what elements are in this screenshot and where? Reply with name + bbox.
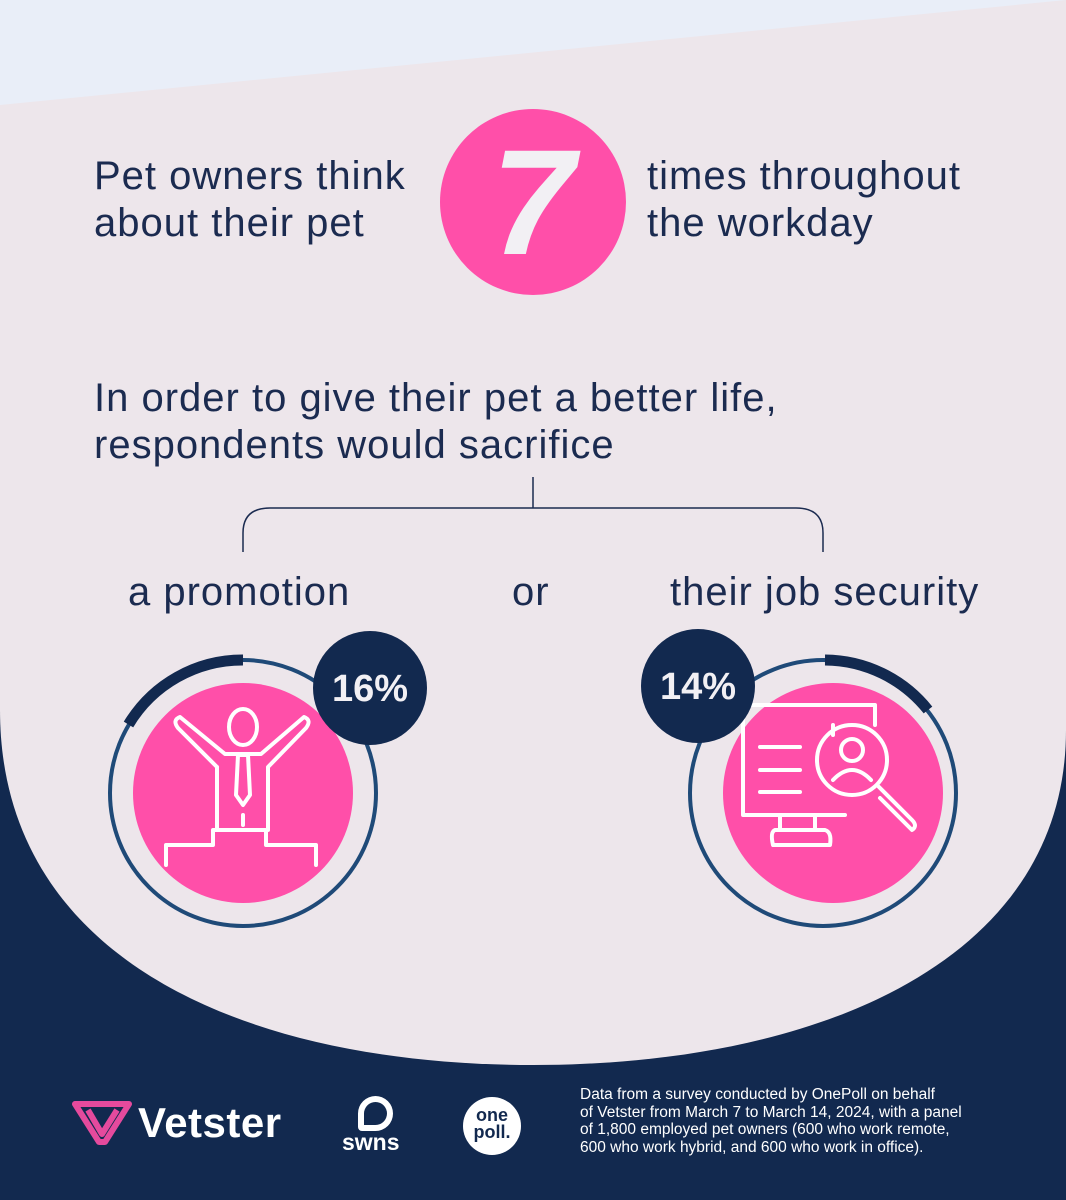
logo: swns: swns bbox=[342, 1129, 400, 1155]
label: job security: their job security bbox=[670, 570, 979, 614]
headline left: about their pet bbox=[94, 201, 365, 245]
headline right: times throughout bbox=[647, 154, 961, 198]
label: promotion: a promotion bbox=[128, 570, 350, 614]
logo: onepoll: poll. bbox=[474, 1122, 510, 1142]
chart: promotion 16% bbox=[108, 631, 427, 928]
source note bbox=[580, 1086, 962, 1156]
headline right: the workday bbox=[647, 201, 874, 245]
badge 16% bbox=[313, 631, 427, 745]
question text bbox=[94, 376, 778, 467]
source note: of Vetster from March 7 to March 14, 2024, with a panel bbox=[580, 1104, 962, 1120]
big number circle: 7 bbox=[491, 118, 575, 286]
source note: 600 who work hybrid, and 600 who work in office). bbox=[580, 1138, 923, 1156]
question text: respondents would sacrifice bbox=[94, 423, 615, 467]
headline left bbox=[94, 154, 406, 245]
headline right bbox=[647, 154, 961, 245]
source note: Data from a survey conducted by OnePoll on behalf bbox=[580, 1086, 935, 1103]
logo: Vetster bbox=[72, 1099, 282, 1146]
logo: Vetster: Vetster bbox=[138, 1099, 282, 1146]
chart: job security 14%: 14% bbox=[660, 666, 736, 708]
badge 14% bbox=[641, 629, 755, 743]
headline left: Pet owners think bbox=[94, 154, 406, 198]
chart: promotion 16%: 16% bbox=[332, 668, 408, 710]
logo: onepoll: one bbox=[476, 1105, 508, 1125]
source note: of 1,800 employed pet owners (600 who work remote, bbox=[580, 1121, 950, 1138]
chart: job security 14% bbox=[641, 629, 958, 928]
bracket connector bbox=[242, 477, 824, 552]
logo: swns bbox=[342, 1096, 400, 1155]
label: or: or bbox=[512, 570, 550, 614]
question text: In order to give their pet a better life, bbox=[94, 376, 778, 420]
logo: onepoll bbox=[463, 1097, 521, 1155]
big number circle bbox=[440, 109, 626, 295]
